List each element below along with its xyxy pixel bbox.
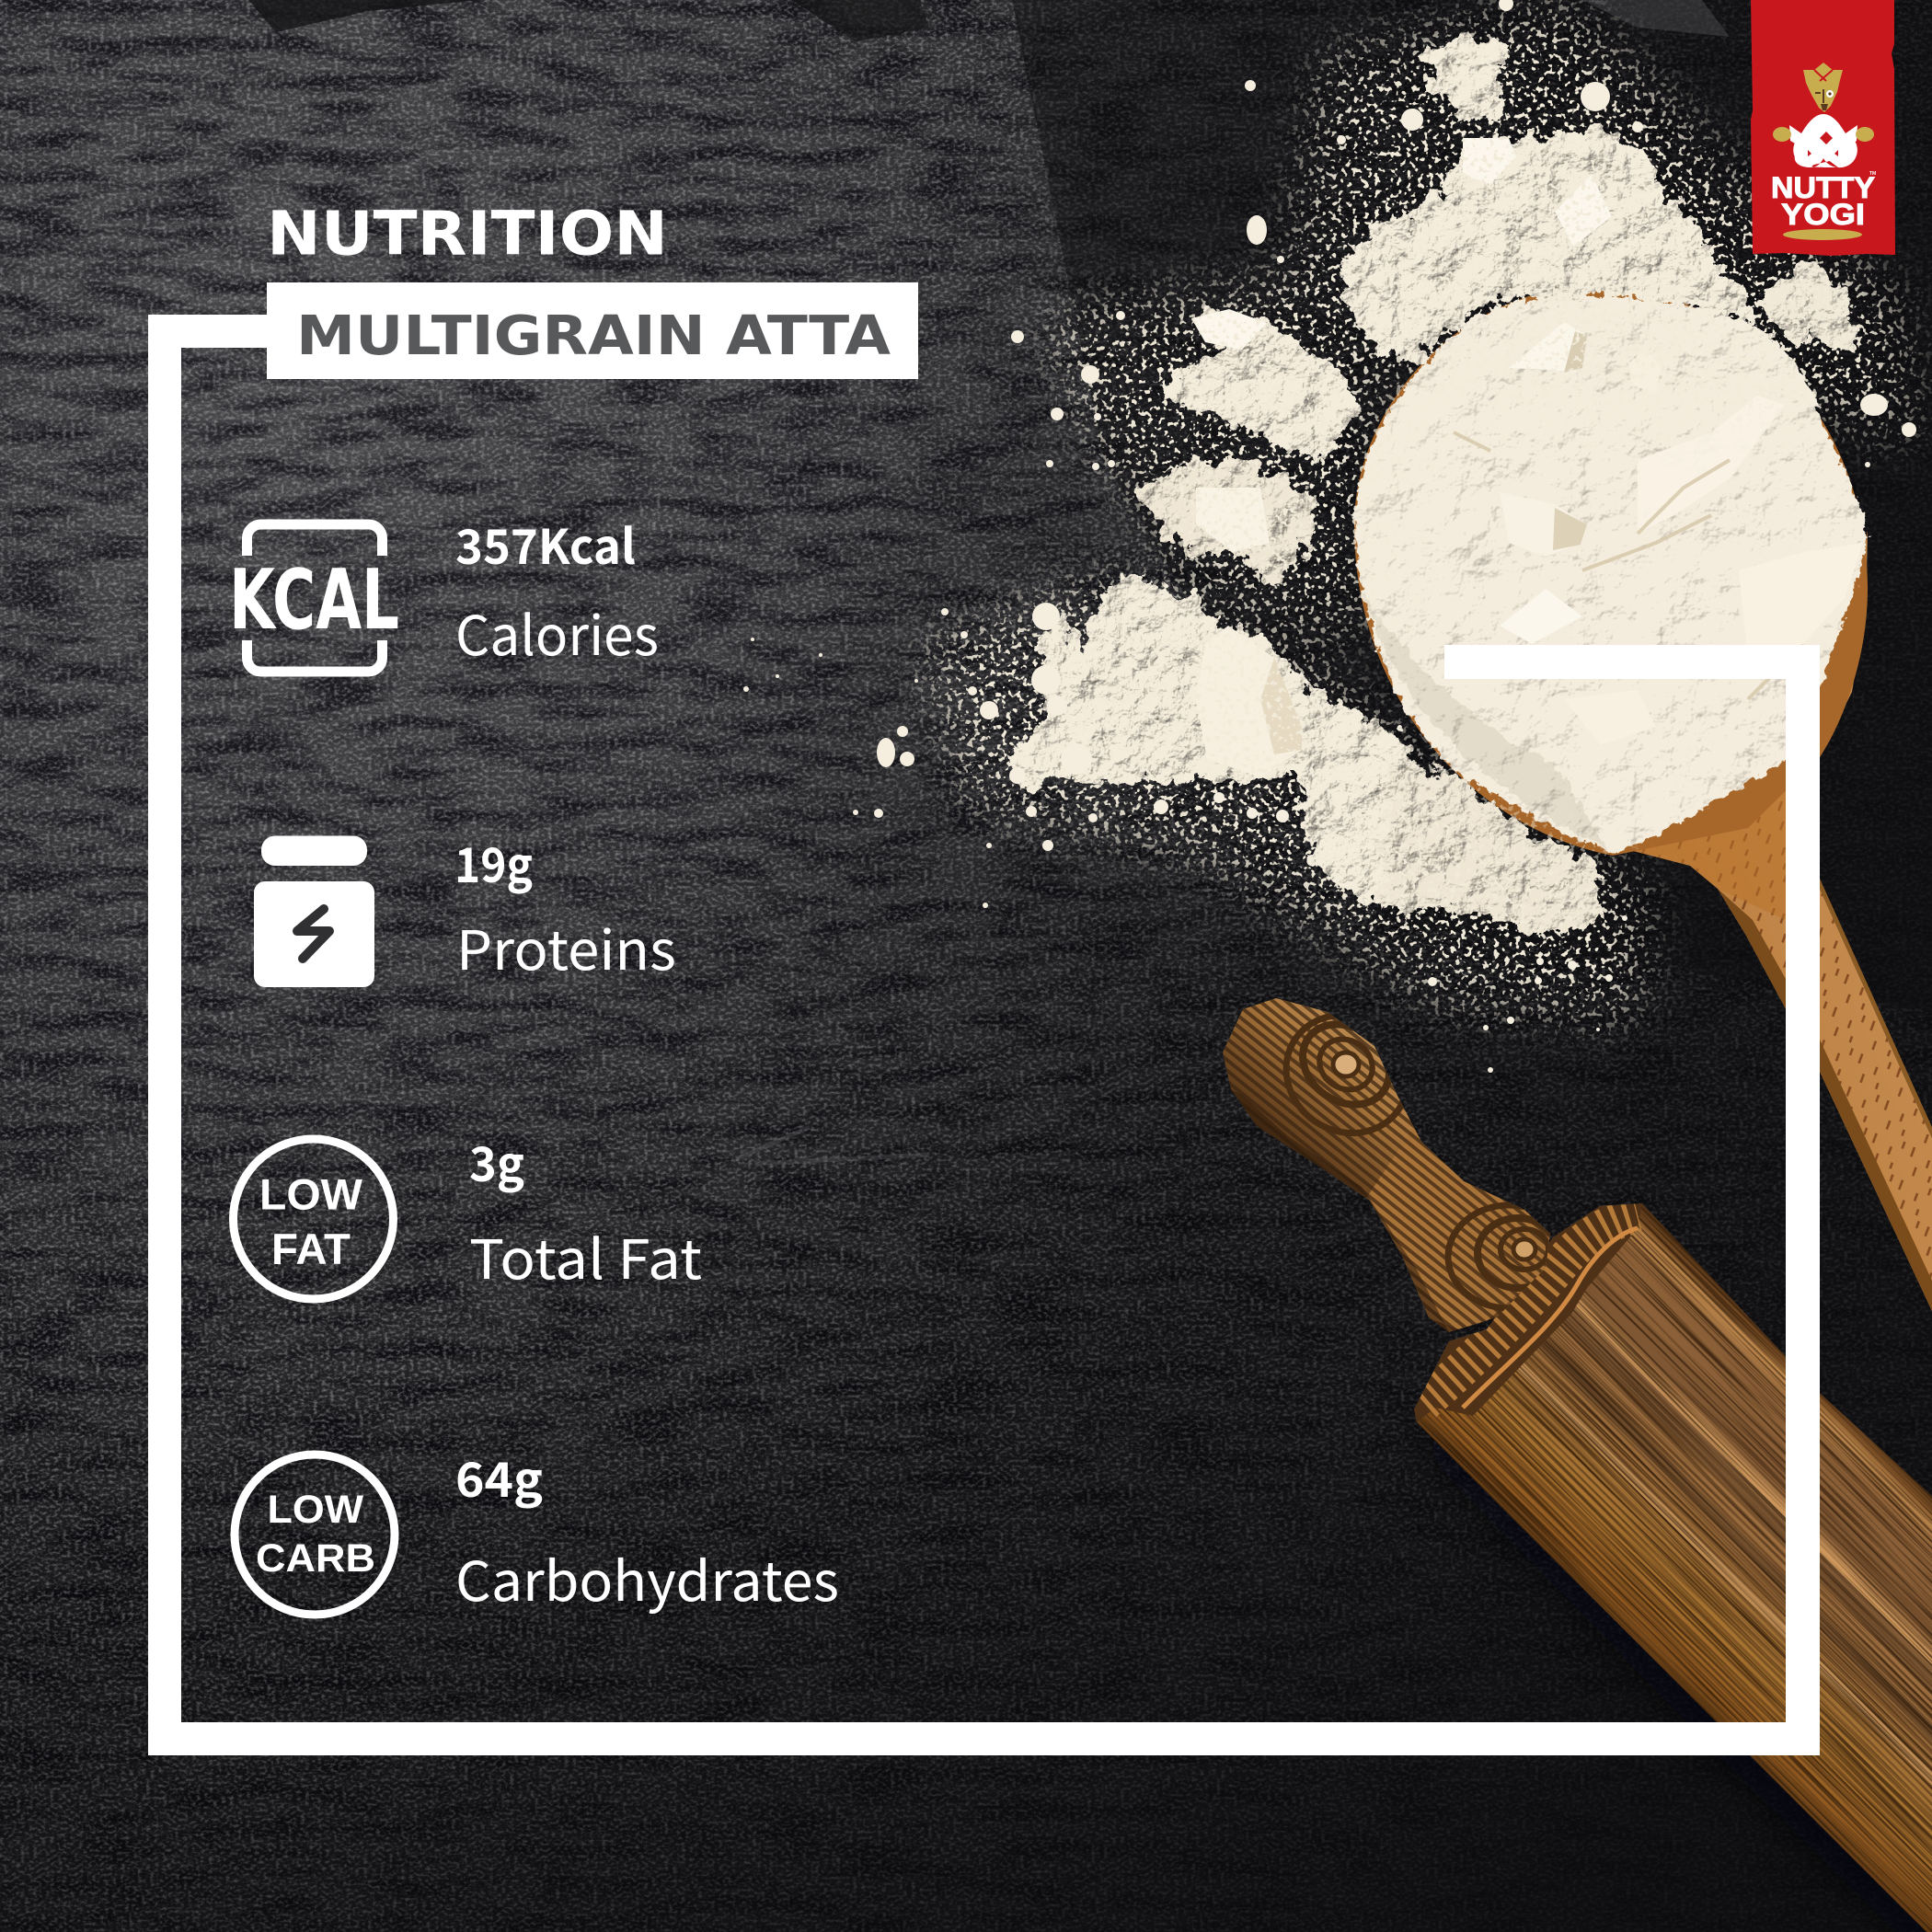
icon: KCAL	[229, 524, 399, 672]
lump pile top	[1463, 138, 1516, 184]
stat: proteins	[454, 827, 676, 985]
stat: proteins: 19g	[454, 827, 533, 896]
illustration: rolling pin	[1214, 992, 1932, 1932]
pin body	[1414, 1203, 1932, 1932]
lump left A	[1191, 309, 1267, 350]
heading label: MULTIGRAIN ATTA	[267, 282, 918, 379]
logo knot figure	[1789, 114, 1857, 167]
logo: Nutty Yogi: YOGI	[1781, 198, 1865, 231]
stat: proteins: Proteins	[456, 907, 676, 985]
icon: KCAL: KCAL	[229, 552, 399, 649]
pile top	[1337, 127, 1754, 362]
icon: low fat badge	[234, 1139, 394, 1299]
icon: low fat badge: LOW	[259, 1170, 363, 1218]
logo hands	[1773, 127, 1791, 142]
icon: low carb badge: CARB	[256, 1536, 375, 1581]
illustration: flour dust	[743, 0, 1932, 1073]
stat: total fat: Total Fat	[469, 1216, 702, 1294]
stat: carbohydrates	[455, 1442, 839, 1616]
stat: calories	[455, 509, 659, 671]
heading: NUTRITION: NUTRITION	[267, 199, 668, 269]
illustration: wooden spoon handle	[1633, 531, 1932, 1311]
soft shading	[1362, 589, 1610, 851]
icon: low fat badge: FAT	[271, 1225, 351, 1273]
logo: Nutty Yogi: TM	[1869, 171, 1876, 177]
illustration: loose flour piles	[1003, 38, 1857, 936]
pile left A	[1163, 309, 1361, 459]
pile big C	[1003, 577, 1472, 919]
stat: calories: 357Kcal	[455, 509, 636, 578]
pin knob handle	[1223, 998, 1550, 1332]
lumps on flour mound	[1454, 322, 1863, 745]
illustration: flour in spoon bowl	[1354, 286, 1868, 856]
stat: carbohydrates: 64g	[455, 1442, 543, 1511]
stat: total fat: 3g	[469, 1126, 524, 1195]
stat: carbohydrates: Carbohydrates	[455, 1538, 839, 1616]
lump pile B	[1196, 488, 1270, 552]
frame: white outline	[148, 315, 1820, 1755]
stat: calories: Calories	[455, 592, 659, 671]
stat: total fat	[469, 1126, 702, 1294]
logo head	[1803, 63, 1843, 112]
heading label: MULTIGRAIN ATTA: MULTIGRAIN ATTA	[296, 304, 891, 367]
pile left B	[1135, 459, 1318, 586]
big lump of flour	[1196, 626, 1302, 777]
pin end grain	[1414, 1203, 1642, 1422]
logo wordmark: NUTTY	[1771, 171, 1875, 204]
logo: Nutty Yogi	[1751, 0, 1895, 256]
icon: protein jar	[254, 835, 374, 987]
extended pile	[1380, 764, 1605, 936]
icon: low carb badge: LOW	[267, 1488, 363, 1532]
icon: low carb badge	[235, 1455, 395, 1615]
